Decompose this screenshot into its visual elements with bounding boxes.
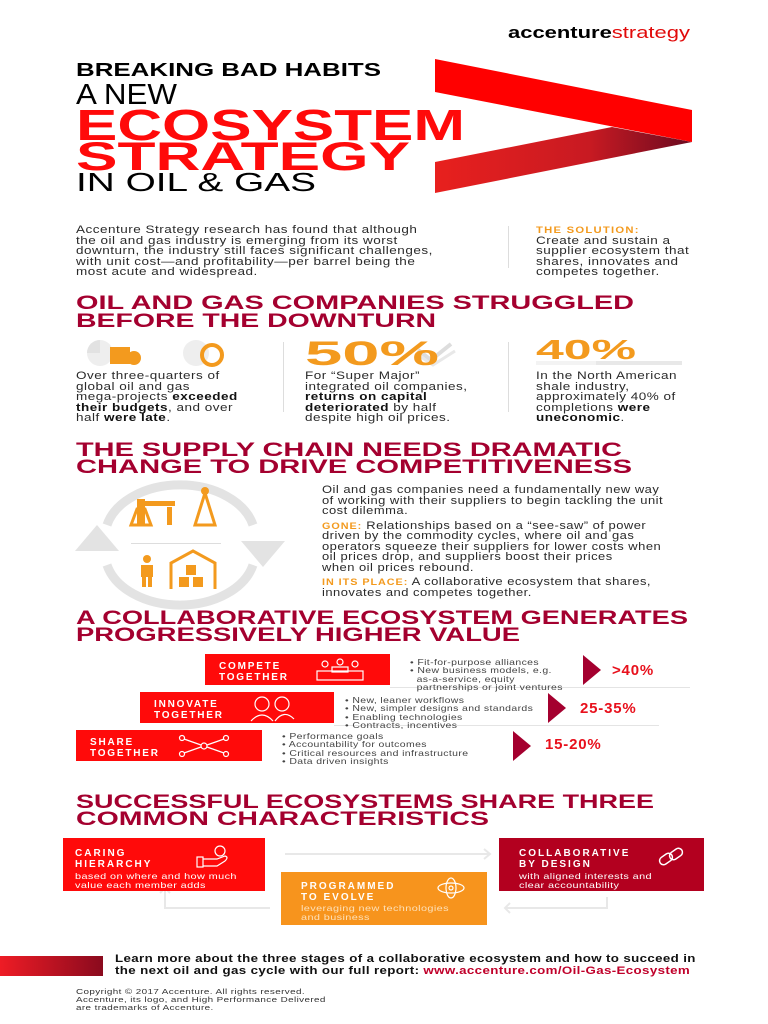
- stat 2: returns on capital: [305, 391, 427, 403]
- stat 2: 50%: [305, 335, 439, 373]
- footer text: the next oil and gas cycle with our full report: www.accenture.com/Oil-Gas-Ecosystem: [115, 964, 690, 976]
- value row: innovate: • Enabling technologies: [345, 712, 463, 722]
- text: half were late.: [76, 412, 171, 424]
- stat 3: 40%: [536, 334, 636, 365]
- title: BREAKING BAD HABITS: [76, 60, 381, 80]
- stat 1: mega-projects exceeded: [76, 391, 238, 403]
- icon: pie & coins: [87, 340, 224, 367]
- value row: compete: [205, 654, 690, 692]
- stat 3: approximately 40% of: [536, 391, 676, 403]
- supply chain text: [322, 484, 663, 598]
- heading: supply chain: THE SUPPLY CHAIN NEEDS DRAMATIC: [76, 440, 622, 461]
- value row: share: • Critical resources and infrastructure: [282, 748, 468, 758]
- stat 3: completions were: [536, 402, 651, 414]
- cycle arrows: [160, 848, 608, 914]
- intro text: the oil and gas industry is emerging from its worst: [76, 234, 398, 246]
- stat 1: their budgets, and over: [76, 402, 233, 414]
- value row: share: • Accountability for outcomes: [282, 739, 427, 749]
- solution text: competes together.: [536, 266, 660, 278]
- chevron graphic: [435, 59, 692, 193]
- value row: share: TOGETHER: [90, 748, 160, 759]
- stat 2: For “Super Major”: [305, 370, 420, 382]
- value row: share: SHARE: [90, 737, 134, 748]
- supply chain text: when oil prices rebound.: [322, 562, 474, 574]
- title: [76, 60, 465, 197]
- card: collaborative by design: clear accountability: [519, 880, 619, 890]
- supply chain text: driven by the commodity cycles, where oil and gas: [322, 530, 634, 542]
- card: programmed to evolve: leveraging new technologies: [301, 903, 449, 913]
- footer text: [115, 953, 696, 976]
- heading: three characteristics: COMMON CHARACTERISTICS: [76, 809, 489, 830]
- heading: collaborative value: A COLLABORATIVE ECOSYSTEM GENERATES: [76, 608, 688, 629]
- intro text: [76, 224, 433, 278]
- icon: atom: [437, 877, 465, 899]
- stat 2: integrated oil companies,: [305, 380, 468, 392]
- supply chain text: of working with their suppliers to begin tackling the unit: [322, 494, 663, 506]
- value row: innovate: • Contracts, incentives: [345, 720, 457, 730]
- solution text: supplier ecosystem that: [536, 245, 689, 257]
- supply chain text: innovates and competes together.: [322, 586, 532, 598]
- card: collaborative by design: [499, 838, 704, 891]
- supply chain text: oil prices drop, and suppliers boost their prices: [322, 551, 613, 563]
- card: caring hierarchy: based on where and how much: [75, 871, 237, 881]
- icon: supply cycle: [75, 480, 285, 610]
- value row: compete: COMPETE: [219, 661, 281, 672]
- card: caring hierarchy: HIERARCHY: [75, 859, 152, 870]
- card: collaborative by design: BY DESIGN: [519, 859, 592, 870]
- solution text: [536, 225, 689, 278]
- value row: share: • Performance goals: [282, 731, 384, 741]
- text: despite high oil prices.: [305, 412, 451, 424]
- value row: innovate: 25-35%: [580, 700, 637, 717]
- stat 1: [76, 340, 238, 424]
- value row: share: • Data driven insights: [282, 756, 389, 766]
- value row: compete: as-a-service, equity: [417, 674, 515, 684]
- value row: compete: TOGETHER: [219, 672, 289, 683]
- value row: share: 15-20%: [545, 736, 602, 753]
- heading: supply chain: CHANGE TO DRIVE COMPETITIVENESS: [76, 457, 632, 478]
- value row: innovate: TOGETHER: [154, 710, 224, 721]
- icon: hand: [196, 845, 228, 868]
- intro text: with unit cost—and profitability—per barrel being the: [76, 256, 415, 268]
- footer text: Learn more about the three stages of a collaborative ecosystem and how to succeed in: [115, 953, 696, 965]
- copyright: Copyright © 2017 Accenture. All rights reserved.: [76, 987, 305, 996]
- heading: struggled: OIL AND GAS COMPANIES STRUGGLED: [76, 293, 634, 314]
- title: A NEW: [76, 79, 178, 111]
- stat 3: shale industry,: [536, 380, 630, 392]
- value row: innovate: • New, leaner workflows: [345, 695, 464, 705]
- value row: compete: • New business models, e.g.: [410, 665, 552, 675]
- card: caring hierarchy: CARING: [75, 848, 126, 859]
- heading: struggled: [76, 293, 634, 332]
- card: programmed to evolve: [281, 872, 487, 925]
- stat 3: [536, 334, 682, 424]
- copyright: Accenture, its logo, and High Performance Delivered: [76, 995, 326, 1004]
- stat 1: global oil and gas: [76, 380, 190, 392]
- value row: compete: partnerships or joint ventures: [417, 682, 563, 692]
- title: ECOSYSTEM: [76, 101, 465, 150]
- solution text: Create and sustain a: [536, 234, 671, 246]
- card: caring hierarchy: value each member adds: [75, 880, 206, 890]
- stat 2: [305, 335, 468, 424]
- value row: innovate: • New, simpler designs and standards: [345, 703, 533, 713]
- value row: innovate: [140, 692, 659, 730]
- logo: accenture strategy: [508, 23, 691, 42]
- stat 2: deteriorated by half: [305, 402, 437, 414]
- supply chain text: Oil and gas companies need a fundamentally new way: [322, 484, 659, 496]
- heading: collaborative value: PROGRESSIVELY HIGHER VALUE: [76, 625, 520, 646]
- supply chain text: IN ITS PLACE: A collaborative ecosystem that shares,: [322, 576, 651, 588]
- heading: struggled: BEFORE THE DOWNTURN: [76, 311, 436, 332]
- copyright: [76, 987, 326, 1012]
- solution text: THE SOLUTION:: [536, 225, 640, 235]
- supply chain text: GONE: Relationships based on a “see-saw” of power: [322, 520, 646, 532]
- footer bar: [0, 956, 103, 976]
- intro text: Accenture Strategy research has found that although: [76, 224, 417, 236]
- heading: collaborative value: [76, 608, 688, 646]
- title: STRATEGY: [76, 135, 410, 179]
- card: collaborative by design: COLLABORATIVE: [519, 848, 630, 859]
- value row: compete: >40%: [612, 662, 654, 679]
- copyright: are trademarks of Accenture.: [76, 1003, 214, 1012]
- stat 1: Over three-quarters of: [76, 370, 220, 382]
- supply chain text: operators squeeze their suppliers for lower costs when: [322, 540, 661, 552]
- heading: supply chain: [76, 440, 632, 478]
- stat 3: In the North American: [536, 370, 677, 382]
- supply chain text: cost dilemma.: [322, 505, 408, 517]
- value row: share: [76, 730, 602, 766]
- text: uneconomic.: [536, 412, 625, 424]
- card: collaborative by design: with aligned interests and: [519, 871, 652, 881]
- card: programmed to evolve: PROGRAMMED: [301, 881, 395, 892]
- heading: three characteristics: SUCCESSFUL ECOSYSTEMS SHARE THREE: [76, 792, 654, 813]
- heading: three characteristics: [76, 792, 654, 830]
- card: programmed to evolve: TO EVOLVE: [301, 892, 375, 903]
- solution text: shares, innovates and: [536, 256, 679, 268]
- value row: compete: • Fit-for-purpose alliances: [410, 657, 539, 667]
- card: programmed to evolve: and business: [301, 912, 370, 922]
- value row: innovate: INNOVATE: [154, 699, 219, 710]
- icon: link: [658, 848, 684, 866]
- intro text: most acute and widespread.: [76, 266, 258, 278]
- intro text: downturn, the industry still faces significant challenges,: [76, 245, 433, 257]
- title: IN OIL & GAS: [76, 167, 316, 197]
- card: caring hierarchy: [63, 838, 265, 891]
